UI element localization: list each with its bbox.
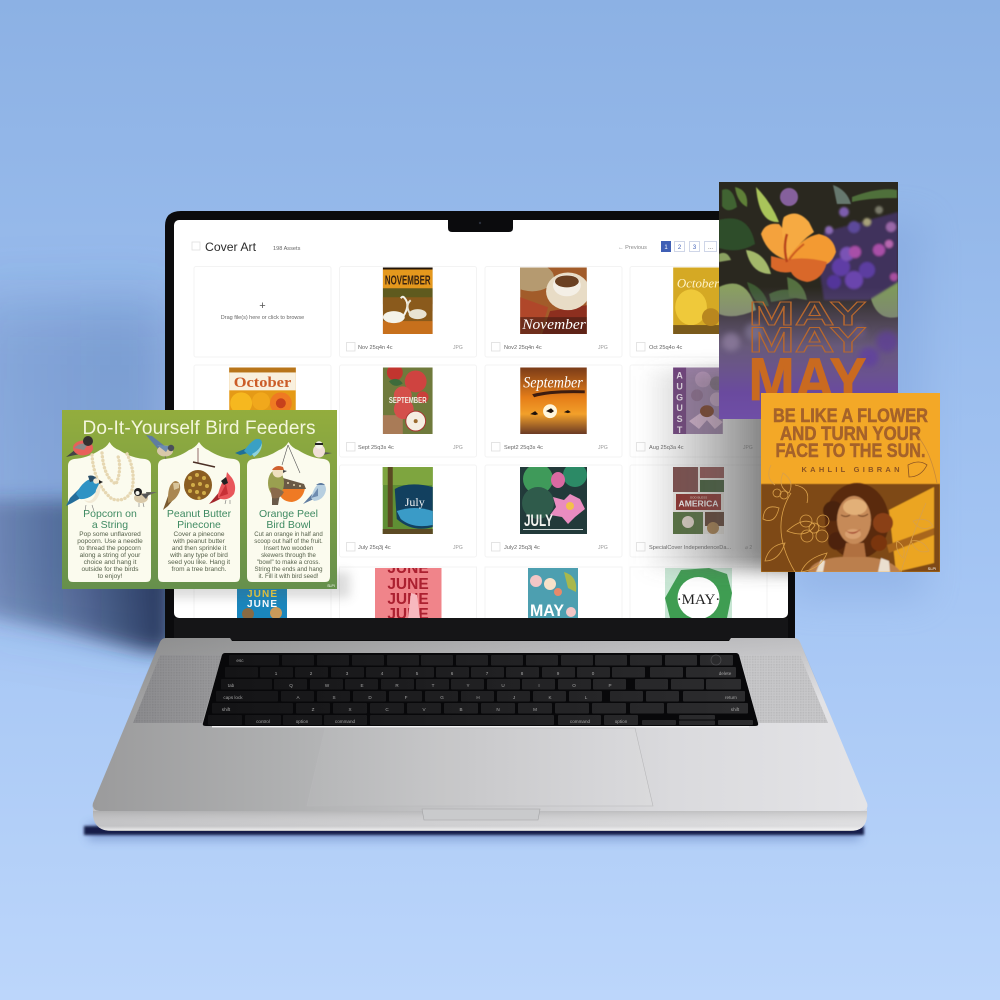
MAY repeated heading: MAY — [748, 346, 866, 413]
icon: woodpecker — [268, 466, 287, 505]
ZXCV row: M — [533, 707, 537, 712]
asset card: SpecialCover IndependenceDay: ⌀ 2 — [745, 545, 752, 551]
body: to thread the popcorn — [79, 545, 141, 552]
body: popcorn. Use a needle — [77, 538, 143, 545]
body: with peanut butter — [172, 538, 226, 545]
heading: Pinecone — [177, 519, 221, 531]
MAY repeated heading: MAY — [748, 295, 866, 332]
asset card: Sept2 25q3s 4c: JPG — [598, 445, 608, 451]
poster: Kahlil Gibran quote: SLPI — [928, 566, 936, 571]
keyboard — [203, 653, 758, 727]
bottom modifier row: option — [615, 719, 628, 724]
body: from a tree branch. — [172, 566, 227, 573]
QWERTY row: O — [572, 683, 576, 688]
poster: Do-It-Yourself Bird Feeders: SLPI — [327, 584, 335, 588]
header: 1 — [664, 245, 668, 251]
cover: God Bless America collage: GOD BLESS — [690, 496, 707, 500]
body: "bowl" to make a cross. — [257, 559, 320, 566]
asset card: Sept 25q3s 4c: Sept 25q3s 4c — [358, 445, 394, 451]
number row: 1 — [275, 671, 278, 676]
number row: 3 — [346, 671, 349, 676]
cover: June red: JUNE — [387, 606, 429, 623]
number row — [225, 667, 736, 678]
asset card: Oct 25q4o 4c — [630, 266, 719, 358]
body: Cut an orange in half and — [254, 531, 323, 538]
body: skewers through the — [261, 552, 317, 559]
cover: June red — [375, 568, 442, 618]
bottom modifier row: control — [256, 719, 270, 724]
ASDF row: G — [440, 695, 444, 700]
quote: AND TURN YOUR — [780, 423, 921, 445]
QWERTY row: Q — [289, 683, 293, 688]
asset card: Nov 25q4n 4c: Nov 25q4n 4c — [358, 345, 393, 351]
ASDF row: F — [405, 695, 408, 700]
screen: Cover Art asset library — [174, 220, 788, 618]
photo of woman — [761, 483, 940, 572]
thumb notch — [422, 809, 540, 820]
ZXCV row: B — [459, 707, 463, 712]
poster: Do-It-Yourself Bird Feeders — [62, 410, 337, 589]
cover: July water lily: JULY — [524, 511, 553, 530]
icon: orange bowl feeder — [277, 445, 306, 502]
asset card: July 25q3j 4c: July 25q3j 4c — [358, 545, 391, 551]
body: outside for the birds — [81, 566, 139, 573]
cover: May teal — [528, 568, 578, 618]
cover: October flowers: October — [234, 375, 292, 391]
number row: 2 — [310, 671, 313, 676]
icon: sparrow — [163, 481, 180, 510]
ASDF row: L — [585, 695, 588, 700]
heading: Bird Bowl — [266, 519, 311, 531]
panel: Orange Peel Bird Bowl — [235, 439, 332, 582]
cover: August coneflowers: U — [676, 381, 683, 391]
heading: Orange Peel — [259, 508, 318, 520]
body: Pop some unflavored — [79, 531, 141, 538]
cast shadows on background — [0, 220, 925, 840]
number row: delete — [719, 671, 732, 676]
cover: August coneflowers: U — [676, 403, 683, 413]
cover: June red: JUNE — [387, 591, 429, 608]
header: ... — [708, 245, 713, 251]
ZXCV row: shift — [222, 707, 231, 712]
icon: titmouse — [313, 441, 332, 458]
asset card: Aug 25q3a 4c: Aug 25q3a 4c — [649, 445, 684, 451]
number row: 4 — [381, 671, 384, 676]
notch with camera — [448, 220, 513, 232]
header: 2 — [678, 245, 682, 251]
cover: October leaves: October — [677, 276, 720, 290]
laptop base — [93, 638, 867, 811]
QWERTY row: T — [432, 683, 435, 688]
trackpad — [307, 728, 653, 806]
QWERTY row: W — [325, 683, 330, 688]
cover: June blue: JUNE — [247, 589, 277, 600]
cover: June blue — [237, 589, 287, 618]
bottom modifier row: command — [570, 719, 591, 724]
title: Do-It-Yourself Bird Feeders — [82, 418, 316, 439]
upload card: Drag file(s) here or click to browse — [221, 315, 304, 321]
header: Cover Art — [205, 242, 257, 254]
asset card: Oct 25q4o 4c: Oct 25q4o 4c — [649, 345, 682, 351]
purple flowers — [819, 206, 898, 300]
QWERTY row: tab — [228, 683, 235, 688]
cover: God Bless America collage: AMERICA — [678, 500, 719, 508]
ASDF row: S — [332, 695, 336, 700]
upload card: + — [259, 300, 266, 312]
ZXCV row: Z — [312, 707, 315, 712]
icon: bullfinch on ledge — [66, 436, 93, 457]
icon: grey-blue bird — [146, 435, 174, 459]
QWERTY row: I — [538, 683, 540, 688]
lower purple haze — [719, 287, 898, 419]
body: Cover a pinecone — [174, 531, 225, 538]
cover: May green: ·MAY· — [677, 592, 720, 608]
panel: Popcorn on a String — [66, 436, 157, 582]
ASDF row: K — [548, 695, 552, 700]
icon: cardinal — [209, 472, 235, 504]
heading: Peanut Butter — [167, 508, 232, 520]
cover: June red: JUNE — [387, 576, 429, 593]
asset card: Nov2 25q4n 4c: JPG — [598, 345, 608, 351]
ZXCV row: V — [422, 707, 426, 712]
ZXCV row: N — [496, 707, 500, 712]
icon: chickadee — [134, 488, 157, 507]
ASDF row: H — [476, 695, 480, 700]
number row: 7 — [486, 671, 489, 676]
body: it. Fill it with bird seed! — [259, 573, 319, 580]
ZXCV row: X — [348, 707, 352, 712]
header: 3 — [693, 245, 697, 251]
asset card: Nov 25q4n 4c: JPG — [453, 345, 463, 351]
ASDF row — [216, 691, 745, 702]
header: 198 Assets — [273, 246, 301, 252]
ASDF row: D — [368, 695, 372, 700]
QWERTY row: P — [608, 683, 612, 688]
icon: popcorn string — [92, 452, 133, 500]
body: along a string of your — [80, 552, 141, 559]
foliage — [719, 185, 898, 318]
asset card: SpecialCover IndependenceDay — [630, 465, 767, 557]
cover: August coneflowers: G — [676, 392, 683, 402]
ZXCV row: shift — [731, 707, 740, 712]
MAY repeated heading — [748, 295, 866, 413]
header: ← Previous — [618, 245, 647, 251]
number row: 0 — [592, 671, 595, 676]
ZXCV row — [212, 703, 748, 714]
base lip — [93, 803, 867, 831]
asset card: SpecialCover IndependenceDay: SpecialCover IndependenceDa... — [649, 545, 732, 551]
ASDF row: return — [725, 695, 737, 700]
bottom modifier row: option — [296, 719, 309, 724]
ASDF row: caps lock — [223, 695, 243, 700]
asset card: Nov2 25q4n 4c: Nov2 25q4n 4c — [504, 345, 542, 351]
asset card: July2 25q3j 4c: JPG — [598, 545, 608, 551]
cover: August coneflowers: T — [677, 425, 683, 435]
function key row: esc — [236, 658, 244, 663]
number row: 6 — [451, 671, 454, 676]
icon: pinecone — [184, 448, 215, 500]
number row: 9 — [557, 671, 560, 676]
cover: June red: JUNE — [387, 560, 429, 577]
asset card: Sept2 25q3s 4c: Sept2 25q3s 4c — [504, 445, 543, 451]
QWERTY row: R — [395, 683, 399, 688]
function key row — [229, 655, 733, 666]
hibiscus flower — [761, 213, 836, 282]
asset card: July 25q3j 4c — [340, 465, 476, 557]
cover: August coneflowers: S — [677, 414, 683, 424]
body: to enjoy! — [98, 573, 122, 580]
cover: August coneflowers — [673, 368, 723, 434]
QWERTY row: E — [360, 683, 364, 688]
asset card: October chrysanthemums — [194, 364, 332, 410]
body: Insert two wooden — [264, 545, 313, 552]
QWERTY row — [221, 679, 741, 690]
speaker grilles — [133, 655, 828, 723]
asset card: Nov 25q4n 4c — [340, 266, 476, 357]
author: KAHLIL GIBRAN — [802, 465, 900, 474]
icon: blue-grey bird — [303, 483, 326, 504]
cover: June blue: JUNE — [247, 599, 277, 610]
asset card: Aug 25q3a 4c: JPG — [743, 445, 753, 451]
icon: blue jay — [66, 476, 103, 511]
floral line art — [763, 438, 937, 572]
bottom modifier row — [208, 715, 753, 725]
asset card: July2 25q3j 4c — [485, 463, 622, 557]
QWERTY row: Y — [466, 683, 470, 688]
upload card — [194, 266, 331, 357]
bottom modifier row: command — [335, 719, 356, 724]
cover: November coffee: November — [521, 317, 586, 333]
quote — [773, 405, 928, 462]
body: scoop out half of the fruit. — [254, 538, 323, 545]
body: with any type of bird — [169, 552, 228, 559]
asset card: Sept2 25q3s 4c — [485, 365, 622, 457]
laptop — [93, 211, 867, 831]
cover: July lake: July — [405, 495, 425, 509]
poster: Kahlil Gibran quote — [761, 393, 940, 572]
ZXCV row: C — [385, 707, 389, 712]
asset card: Aug 25q3a 4c — [630, 365, 767, 457]
cover: God Bless America collage — [673, 467, 724, 534]
body: String the ends and hang — [254, 566, 323, 573]
asset card: Oct 25q4o 4c: JPG — [743, 345, 753, 351]
body: seed you like. Hang it — [168, 559, 230, 566]
cover: May teal: MAY — [530, 601, 565, 620]
shadow cast on screen by posters — [150, 370, 830, 598]
panel: Peanut Butter Pinecone — [146, 435, 240, 582]
poster: May hibiscus — [719, 182, 898, 419]
cover row 4 — [194, 566, 768, 618]
MAY repeated heading: MAY — [748, 321, 866, 360]
asset card: July2 25q3j 4c: July2 25q3j 4c — [504, 545, 540, 551]
laptop lid bezel — [165, 211, 795, 641]
cover: May green — [665, 568, 732, 618]
heading: a String — [92, 519, 128, 531]
QWERTY row: U — [501, 683, 505, 688]
body: and then sprinkle it — [172, 545, 226, 552]
number row: 8 — [521, 671, 524, 676]
body: choice and hang it — [84, 559, 137, 566]
heading: Popcorn on — [83, 508, 137, 520]
cover: August coneflowers: A — [676, 370, 683, 380]
ASDF row: J — [513, 695, 515, 700]
asset card: Nov2 25q4n 4c — [485, 264, 622, 357]
asset card: Sept 25q3s 4c — [340, 365, 476, 457]
icon: bluebird — [235, 439, 262, 457]
asset card: Sept 25q3s 4c: JPG — [453, 445, 463, 451]
number row: 5 — [416, 671, 419, 676]
header — [192, 241, 717, 252]
ASDF row: A — [296, 695, 300, 700]
asset card: July 25q3j 4c: JPG — [453, 545, 463, 551]
